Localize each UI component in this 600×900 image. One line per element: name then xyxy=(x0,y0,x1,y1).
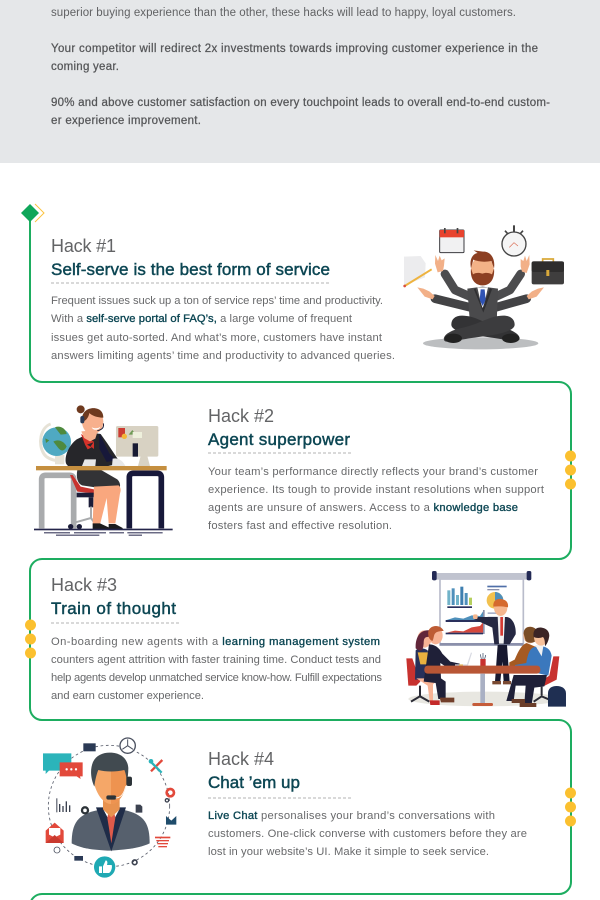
hack 4 body: lost in your website’s UI. Make it simple to seek service. xyxy=(208,846,489,858)
panel: hack 3 xyxy=(51,571,566,707)
icon: gears xyxy=(132,789,174,865)
hack 2 body xyxy=(208,466,545,532)
icon: envelope top xyxy=(83,743,96,751)
icon: briefcase xyxy=(532,259,564,284)
hack 3 body: help agents develop unmatched service know-how. Fulfill expectations xyxy=(51,672,382,684)
connector dots: hack 2 xyxy=(565,450,576,490)
hack 1 title: Self-serve is the best form of service xyxy=(51,260,330,279)
intro text: Your competitor will redirect 2x investments towards improving customer experience in the xyxy=(51,43,538,55)
meeting table xyxy=(424,666,540,706)
icon: stopwatch xyxy=(502,225,526,256)
icon: backpack xyxy=(548,686,566,707)
icon: calendar xyxy=(440,228,464,253)
agent figure xyxy=(66,405,125,529)
illustration: support agent at desk xyxy=(34,405,173,536)
panel: hack 1 xyxy=(51,225,564,362)
connector dots: hack 4 xyxy=(565,788,576,826)
floor xyxy=(34,529,173,536)
intro text: er experience improvement. xyxy=(51,115,201,127)
icon: clock xyxy=(120,738,135,753)
intro text xyxy=(51,7,550,127)
illustration: team meeting with presenter xyxy=(406,571,566,707)
panel: intro xyxy=(0,0,600,163)
illustration: multitasking meditating man xyxy=(403,225,564,349)
icon: envelope teal xyxy=(166,816,176,825)
icon: gear dark xyxy=(82,807,88,813)
presenter xyxy=(473,599,516,684)
pie chart xyxy=(487,586,507,609)
hack 2 body: experience. Its tough to provide instant resolutions when support xyxy=(208,484,545,496)
intro text: coming year. xyxy=(51,61,119,73)
icon: thumbs up xyxy=(94,856,115,878)
bar chart xyxy=(447,587,472,608)
presentation board xyxy=(432,571,531,646)
icon: open mail xyxy=(46,823,64,843)
chair xyxy=(68,475,97,529)
icon: monitor xyxy=(116,426,158,466)
connector dots: hack 3 xyxy=(25,620,36,658)
hack 1 body: issues get auto-sorted. And what’s more, customers have instant xyxy=(51,332,383,344)
icon: paper and pencil xyxy=(403,256,432,287)
hack 2 label: Hack #2 xyxy=(208,406,274,426)
hack 1 label: Hack #1 xyxy=(51,236,116,256)
icon: tools xyxy=(149,759,162,773)
panel: hack 4 xyxy=(43,738,527,878)
hack 2 body: Your team’s performance directly reflects your brand’s customer xyxy=(208,466,538,478)
hack 2 body: fosters fast and effective resolution. xyxy=(208,520,392,532)
icon: start diamond xyxy=(21,204,44,222)
hack 2 body: agents are unsure of answers. Access to a knowledge base xyxy=(208,502,518,514)
right attendees xyxy=(506,627,566,707)
frames xyxy=(42,475,74,528)
intro text: 90% and above customer satisfaction on every touchpoint leads to overall end-to-end custom- xyxy=(51,97,550,109)
hack 3 body xyxy=(51,636,382,702)
icon: cart list xyxy=(155,837,170,847)
hack 3 title: Train of thought xyxy=(51,599,176,618)
hack 1 body xyxy=(51,295,395,362)
hack 4 body xyxy=(208,810,527,858)
hack 4 label: Hack #4 xyxy=(208,749,274,769)
hack 1 body: Frequent issues suck up a ton of service reps’ time and productivity. xyxy=(51,295,383,307)
figure xyxy=(417,250,544,343)
hack 4 body: customers. One-click converse with customers before they are xyxy=(208,828,527,840)
intro text: superior buying experience than the other, these hacks will lead to happy, loyal customers. xyxy=(51,7,516,19)
laptop and props xyxy=(455,652,486,670)
hack 1 body: With a self-serve portal of FAQ’s, a large volume of frequent xyxy=(51,313,353,325)
agent figure xyxy=(72,753,150,851)
icon: bar chart small xyxy=(56,798,70,812)
hack 4 body: Live Chat personalises your brand’s conversations with xyxy=(208,810,495,822)
hack 4 title: Chat ’em up xyxy=(208,773,300,792)
icon: document xyxy=(136,805,142,813)
area charts xyxy=(446,610,501,634)
hack 3 label: Hack #3 xyxy=(51,575,117,595)
icon: globe xyxy=(41,424,71,464)
hack 3 body: counters agent attrition with faster training time. Conduct tests and xyxy=(51,654,381,666)
panel: hack 2 xyxy=(34,405,545,536)
desk xyxy=(36,466,167,470)
illustration: live chat agent with icons xyxy=(43,738,176,878)
hack 3 body: On-boarding new agents with a learning management system xyxy=(51,636,380,648)
timeline path xyxy=(30,213,571,900)
hack 1 body: answers limiting agents’ time and productivity to advanced queries. xyxy=(51,350,395,362)
icon: chat bubbles xyxy=(43,753,83,779)
hack 2 title: Agent superpower xyxy=(208,430,350,449)
left attendees xyxy=(406,626,460,705)
hack 3 body: and earn customer experience. xyxy=(51,690,204,702)
